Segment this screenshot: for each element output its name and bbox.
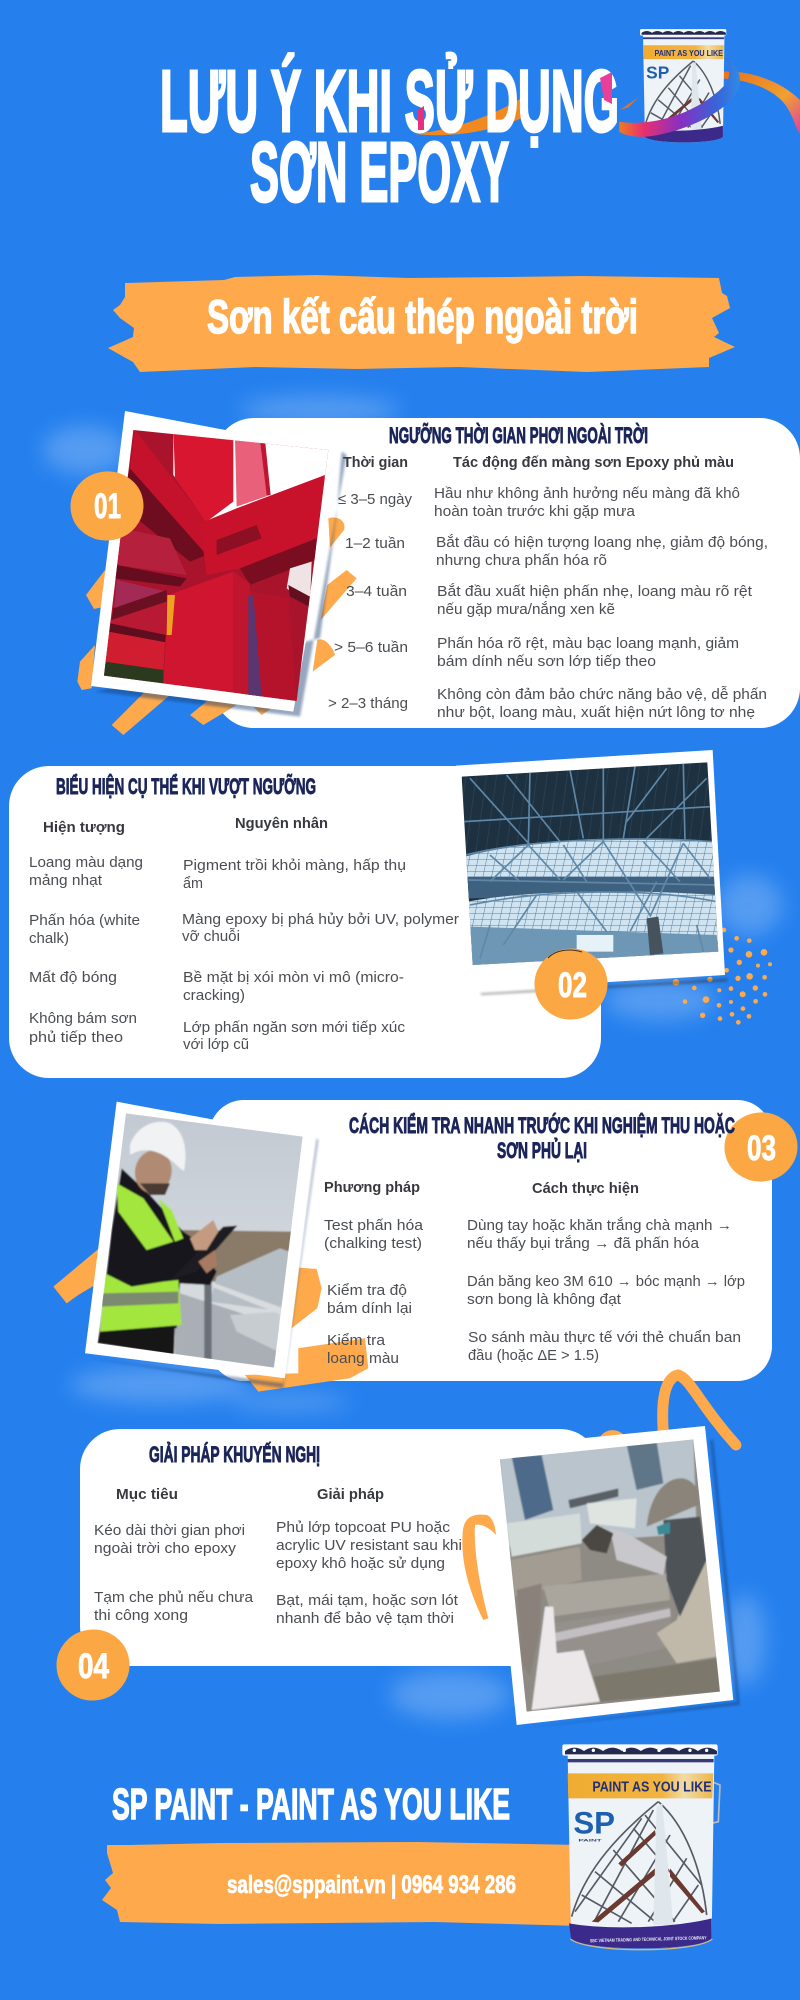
paint bucket: SP (573, 1804, 615, 1840)
table 2 text: với lớp cũ (183, 1036, 249, 1053)
badge 04 (52, 1625, 134, 1705)
table 4 text: nhanh để bảo vệ tạm thời (276, 1610, 454, 1627)
table 3 text: Dán băng keo 3M 610 → bóc mạnh → lớp (467, 1273, 745, 1290)
photo frame: red steel structure (91, 411, 347, 717)
orange brush strokes 1 (77, 517, 357, 735)
heading: SƠN PHỦ LẠI (497, 1138, 587, 1163)
table 2 text: chalk) (29, 930, 69, 947)
table 1 text: hoàn toàn trước khi gặp mưa (434, 503, 636, 520)
footer contact banner (102, 1842, 580, 1926)
paint bucket: PAINT AS YOU LIKE (592, 1780, 712, 1796)
table 1 text: > 2–3 tháng (328, 695, 408, 712)
icon: paint bucket with ribbon (619, 29, 800, 142)
table 4 text: Bạt, mái tạm, hoặc sơn lót (276, 1592, 459, 1609)
table 2 text: Phấn hóa (white (29, 912, 140, 929)
paint bucket (562, 1744, 720, 1950)
orange curve (462, 1515, 496, 1620)
paint bucket: PAINT (578, 1838, 603, 1843)
decorative clouds (43, 396, 782, 1719)
orange banner: subtitle (108, 275, 735, 372)
table 4 text: Phủ lớp topcoat PU hoặc (276, 1519, 451, 1536)
table 3 text (324, 1179, 745, 1367)
table 2 text: Hiện tượng (43, 819, 125, 836)
table 4 text: epoxy khô hoặc sử dụng (276, 1555, 445, 1572)
title: SƠN EPOXY (250, 125, 509, 219)
table 1 text: như bột, loang màu, xuất hiện nứt lông tơ nhẹ (437, 704, 755, 721)
table 1 text: > 5–6 tuần (334, 639, 408, 656)
table 3 text: (chalking test) (324, 1235, 422, 1252)
table 2 text: Bề mặt bị xói mòn vi mô (micro- (183, 969, 404, 986)
title accent (418, 72, 612, 130)
table 1 text: Bắt đầu xuất hiện phấn nhẹ, loang màu rõ rệt (437, 583, 753, 600)
table 4 text: acrylic UV resistant sau khi (276, 1537, 462, 1554)
badge 03: 03 (747, 1129, 776, 1168)
icon: paint bucket with ribbon: PAINT AS YOU LIKE (655, 49, 723, 58)
heading: GIẢI PHÁP KHUYẾN NGHỊ (149, 1442, 320, 1467)
table 4 text: thi công xong (94, 1607, 188, 1624)
table 3 text: Dùng tay hoặc khăn trắng chà mạnh → (467, 1217, 732, 1234)
table 1 text: Thời gian (343, 454, 408, 471)
panel: signs after threshold (9, 750, 772, 1078)
table 3 text: đầu (hoặc ΔE > 1.5) (468, 1347, 599, 1364)
table 1 text: Tác động đến màng sơn Epoxy phủ màu (453, 454, 734, 471)
heading (349, 1113, 735, 1163)
table 3 text: loang màu (327, 1350, 399, 1367)
table 1 text: bám dính nếu sơn lớp tiếp theo (437, 653, 656, 670)
table 4 text: ngoài trời cho epoxy (94, 1540, 237, 1557)
orange brush strokes 3 (53, 1249, 368, 1392)
table 2 text: cracking) (183, 987, 245, 1004)
table 2 text: phủ tiếp theo (29, 1029, 123, 1046)
footer slogan: SP PAINT - PAINT AS YOU LIKE (112, 1780, 510, 1829)
table 2 text: ẩm (183, 875, 203, 892)
table 1 text: ≤ 3–5 ngày (338, 491, 412, 508)
table 3 text: Cách thực hiện (532, 1180, 639, 1197)
photo frame: inspector (85, 1102, 318, 1388)
table 3 text: bám dính lại (327, 1300, 412, 1317)
orange blob (600, 1430, 625, 1437)
table 2 text: vỡ chuỗi (182, 928, 240, 945)
table 2 text: Loang màu dạng (29, 854, 143, 871)
table 1 text (328, 454, 768, 721)
table 1 text: nhưng chưa phấn hóa rõ (436, 552, 607, 569)
panel: exposure time thresholds (67, 411, 800, 735)
table 4 text: Kéo dài thời gian phơi (94, 1522, 245, 1539)
table 2 text: Màng epoxy bị phá hủy bởi UV, polymer (182, 911, 459, 928)
badge 02: 02 (558, 966, 587, 1005)
table 4 text (94, 1486, 462, 1627)
table 3 text: Kiểm tra độ (327, 1282, 407, 1299)
table 1 text: 1–2 tuần (345, 535, 405, 552)
badge 03 (721, 1108, 800, 1186)
table 2 text (29, 815, 459, 1053)
badge 01: 01 (94, 487, 121, 526)
orange dots (673, 928, 772, 1025)
table 2 text: mảng nhạt (29, 872, 103, 889)
badge 01 (67, 467, 147, 545)
arch stroke (663, 1375, 736, 1445)
table 2 text: Mất độ bóng (29, 969, 117, 986)
table 1 text: Hầu như không ảnh hưởng nếu màng đã khô (434, 485, 740, 502)
photo frame: steel roof truss (456, 750, 728, 995)
table 1 text: Không còn đảm bảo chức năng bảo vệ, dễ phấn (437, 686, 767, 703)
table 2 text: Pigment trồi khỏi màng, hấp thụ (183, 857, 406, 874)
table 3 text: So sánh màu thực tế với thẻ chuẩn ban (468, 1329, 741, 1346)
heading: BIỂU HIỆN CỤ THỂ KHI VƯỢT NGƯỠNG (56, 774, 316, 799)
table 1 text: Bắt đầu có hiện tượng loang nhẹ, giảm độ bóng, (436, 534, 768, 551)
photo frame: worker (488, 1426, 740, 1728)
table 1 text: 3–4 tuần (346, 583, 407, 600)
panel: recommended solutions (52, 1426, 740, 1728)
badge 02 (530, 944, 612, 1024)
table 2 text: Lớp phấn ngăn sơn mới tiếp xúc (183, 1019, 406, 1036)
table 3 text: Kiểm tra (327, 1332, 386, 1349)
paint bucket: SBC VIETNAM TRADING AND TECHNICAL JOINT STOCK COMPANY (590, 1935, 707, 1943)
table 2 text: Không bám sơn (29, 1010, 137, 1027)
table 4 text: Tạm che phủ nếu chưa (94, 1589, 254, 1606)
footer contact banner: sales@sppaint.vn | 0964 934 286 (227, 1871, 516, 1899)
title (160, 53, 619, 219)
table 3 text: sơn bong là không đạt (467, 1291, 622, 1308)
table 1 text: nếu gặp mưa/nắng xen kẽ (437, 601, 615, 618)
table 4 text: Giải pháp (317, 1486, 384, 1503)
table 4 text: Mục tiêu (116, 1486, 178, 1503)
table 2 text: Nguyên nhân (235, 815, 328, 832)
table 3 text: nếu thấy bụi trắng → đã phấn hóa (467, 1235, 700, 1252)
badge 04: 04 (78, 1647, 109, 1686)
table 3 text: Test phấn hóa (324, 1217, 424, 1234)
panel: quick checks (53, 1100, 800, 1445)
table 1 text: Phấn hóa rõ rệt, màu bạc loang mạnh, giảm (437, 635, 739, 652)
table 3 text: Phương pháp (324, 1179, 420, 1196)
title swoosh (415, 96, 525, 135)
icon: paint bucket with ribbon: SP (646, 63, 670, 83)
